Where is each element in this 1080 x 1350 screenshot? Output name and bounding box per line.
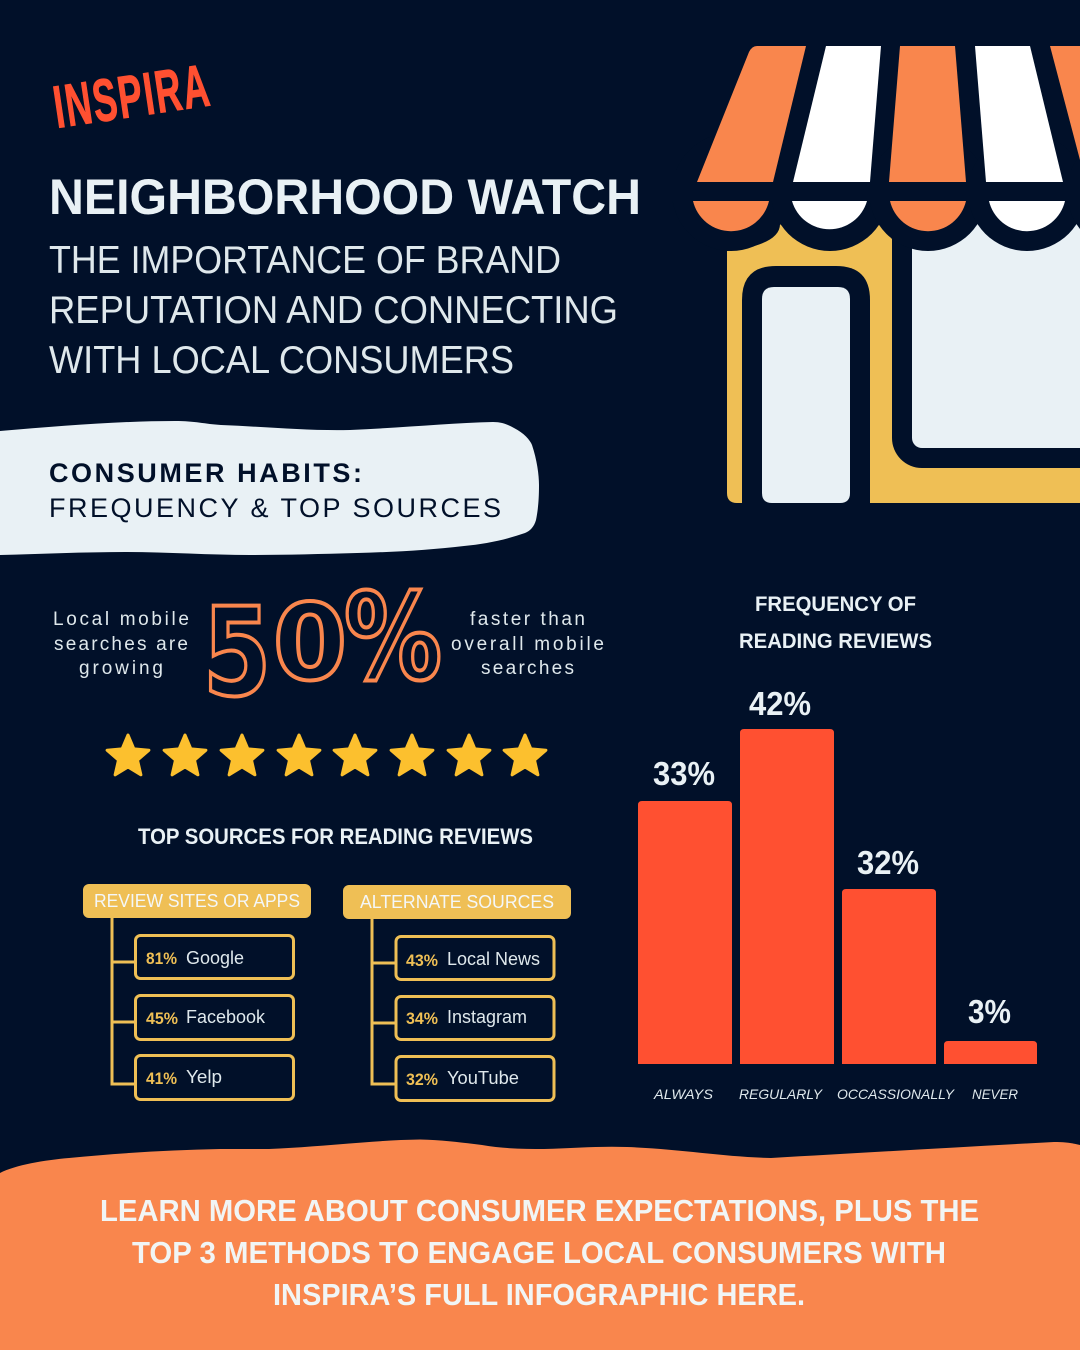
- subtitle: THE IMPORTANCE OF BRAND: [49, 239, 561, 282]
- item: Yelp 41%: [136, 1056, 294, 1100]
- bar: occassionally 32%: OCCASSIONALLY: [837, 1086, 956, 1102]
- panel: call to action footer: TOP 3 METHODS TO ENGAGE LOCAL CONSUMERS WITH: [132, 1235, 946, 1270]
- big stat: 50%: %: [344, 569, 442, 708]
- text: faster than overall mobile searches: overall mobile: [451, 634, 604, 655]
- text: faster than overall mobile searches: [451, 609, 604, 679]
- bar chart: frequency of reading reviews: [638, 685, 1037, 1102]
- bar: regularly 42%: [739, 685, 834, 1102]
- logo: Inspira: INSPIRA: [49, 52, 213, 141]
- item: Facebook 45%: 45%: [146, 1009, 178, 1028]
- bar: regularly 42%: 42%: [749, 685, 811, 722]
- panel: call to action footer: INSPIRA’S FULL INFOGRAPHIC HERE.: [273, 1277, 805, 1312]
- label: review sites or apps: [83, 884, 311, 918]
- item: Yelp 41%: 41%: [146, 1069, 177, 1088]
- panel: consumer habits banner: FREQUENCY & TOP SOURCES: [49, 493, 501, 523]
- panel: review sites or apps: [83, 884, 311, 1100]
- title: NEIGHBORHOOD WATCH: [49, 169, 641, 225]
- big stat: 50%: 0: [273, 582, 347, 704]
- label: alternate sources: ALTERNATE SOURCES: [360, 892, 554, 912]
- item: Google 81%: [136, 936, 294, 978]
- text: local mobile searches are growing: growing: [79, 658, 163, 679]
- panel: consumer habits banner: CONSUMER HABITS:: [49, 458, 362, 488]
- item: Google 81%: 81%: [146, 949, 177, 968]
- panel: consumer habits banner: [0, 421, 539, 555]
- heading: frequency of reading reviews: FREQUENCY OF: [755, 593, 916, 616]
- bar: always 33%: 33%: [653, 755, 715, 792]
- panel: alternate sources: [343, 885, 571, 1100]
- item: Instagram 34%: Instagram: [447, 1007, 527, 1027]
- subtitle: [49, 239, 618, 382]
- item: YouTube 32%: 32%: [406, 1070, 438, 1089]
- item: Instagram 34%: 34%: [406, 1009, 438, 1028]
- heading: frequency of reading reviews: [739, 593, 932, 653]
- text: local mobile searches are growing: searches are: [54, 634, 188, 655]
- panel: call to action footer: [0, 1140, 1080, 1350]
- subtitle: REPUTATION AND CONNECTING: [49, 289, 618, 332]
- subtitle: WITH LOCAL CONSUMERS: [49, 339, 514, 382]
- heading: top sources: TOP SOURCES FOR READING REVIEWS: [138, 824, 533, 849]
- item: Local News 43%: 43%: [406, 951, 438, 970]
- bar: occassionally 32%: 32%: [857, 844, 919, 881]
- item: Facebook 45%: [136, 996, 294, 1040]
- bar: always 33%: [638, 755, 732, 1102]
- bar: occassionally 32%: [837, 844, 956, 1102]
- item: YouTube 32%: YouTube: [447, 1068, 519, 1088]
- bar: never 3%: NEVER: [972, 1086, 1018, 1102]
- item: YouTube 32%: [396, 1056, 554, 1100]
- text: local mobile searches are growing: [53, 609, 189, 679]
- big stat: 50%: 5: [203, 582, 271, 724]
- item: Facebook 45%: Facebook: [186, 1007, 266, 1027]
- bar: regularly 42%: REGULARLY: [739, 1086, 824, 1102]
- text: faster than overall mobile searches: faster than: [470, 609, 585, 630]
- icon: row of eight stars: [107, 735, 546, 775]
- panel: call to action footer: LEARN MORE ABOUT CONSUMER EXPECTATIONS, PLUS THE: [100, 1193, 979, 1228]
- text: faster than overall mobile searches: searches: [481, 658, 574, 679]
- item: Local News 43%: Local News: [447, 949, 540, 969]
- bar: always 33%: ALWAYS: [653, 1086, 714, 1102]
- icon: storefront: [660, 46, 1080, 503]
- heading: frequency of reading reviews: READING REVIEWS: [739, 630, 932, 653]
- bar: never 3%: 3%: [968, 993, 1011, 1030]
- item: Local News 43%: [396, 936, 554, 980]
- label: review sites or apps: REVIEW SITES OR APPS: [94, 891, 300, 911]
- item: Google 81%: Google: [186, 948, 244, 968]
- bar: never 3%: [944, 993, 1037, 1102]
- item: Instagram 34%: [396, 996, 554, 1040]
- label: alternate sources: [343, 885, 571, 919]
- item: Yelp 41%: Yelp: [186, 1067, 222, 1087]
- text: local mobile searches are growing: Local mobile: [53, 609, 189, 630]
